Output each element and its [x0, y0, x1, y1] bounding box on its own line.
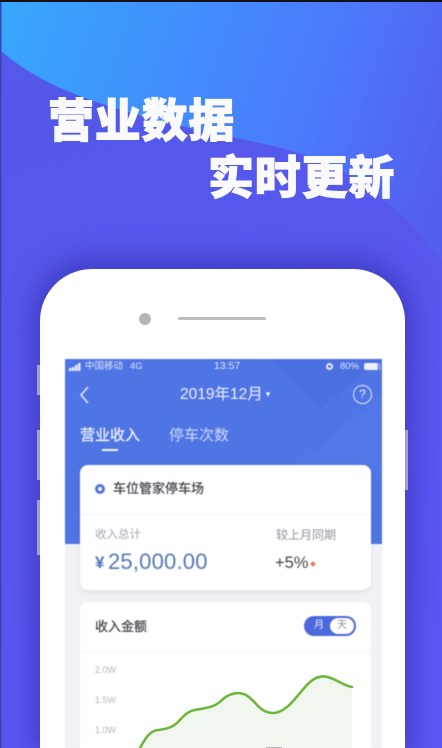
- toggle day: [330, 618, 354, 634]
- battery percent: 80%: [340, 361, 359, 372]
- header decoration: [65, 359, 382, 544]
- title line 1: 营业数据: [48, 85, 235, 151]
- status bar: [68, 360, 382, 372]
- revenue card: [80, 465, 371, 590]
- card divider: [80, 514, 371, 515]
- battery status: [325, 361, 382, 372]
- location pin: [95, 484, 105, 494]
- tab: revenue: 营业收入: [80, 427, 140, 444]
- carrier: 中国移动: [85, 361, 123, 372]
- location glyph: [326, 363, 333, 370]
- month selector: 2019年12月 ▾: [180, 386, 270, 403]
- parking lot name: 车位管家停车场: [113, 481, 204, 496]
- y axis labels: [95, 665, 116, 735]
- currency sign: ¥: [95, 553, 104, 572]
- battery icon: [364, 363, 381, 370]
- help icon: ?: [359, 387, 366, 401]
- blue header band: [65, 359, 382, 544]
- title line 2: 实时更新: [208, 142, 395, 208]
- phone mockup: [22, 248, 423, 748]
- app screen: [65, 359, 382, 748]
- toggle day: 天: [337, 620, 347, 631]
- chart card: [80, 602, 371, 748]
- total amount: 25,000.00: [108, 549, 208, 574]
- month/day toggle: [304, 616, 356, 636]
- clock: 13:57: [214, 360, 240, 372]
- network type: 4G: [130, 361, 143, 372]
- phone body: [40, 269, 405, 748]
- tab indicator: [102, 449, 118, 451]
- label 2.0W: 2.0W: [95, 665, 116, 675]
- toggle month: 月: [314, 620, 324, 631]
- signal bars: [68, 362, 82, 372]
- phone side buttons: [37, 365, 408, 555]
- back arrow: [80, 386, 89, 404]
- comparison label: 较上月同期: [276, 528, 336, 542]
- label 1.0W: 1.0W: [95, 725, 116, 735]
- label 1.5W: 1.5W: [95, 695, 116, 705]
- comparison value: +5%: [275, 554, 308, 572]
- up marker: [310, 561, 316, 567]
- total label: 收入总计: [95, 529, 141, 541]
- chart heading: 收入金额: [95, 619, 147, 634]
- heading divider: [80, 651, 371, 652]
- title: [48, 85, 395, 208]
- help icon: [353, 385, 372, 404]
- camera dot: [139, 313, 151, 325]
- speaker bar: [178, 317, 266, 320]
- tab: parking count: 停车次数: [169, 427, 229, 444]
